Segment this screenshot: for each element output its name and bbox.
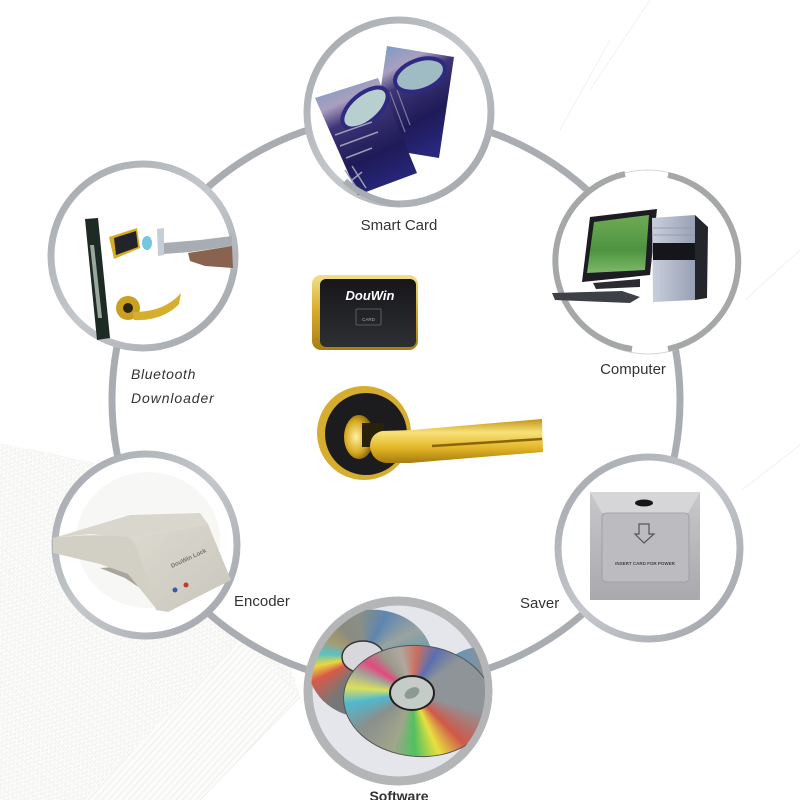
card zone text: CARD [362,317,376,322]
indicator [635,500,653,506]
tower [652,215,708,302]
top face [53,513,208,538]
card zone [356,309,381,325]
label: saver: Saver [520,595,559,612]
rose [317,386,411,480]
gold reader [109,228,140,259]
front disc [343,644,485,758]
red LED [184,582,188,588]
lever [370,419,543,463]
monitor [582,209,657,289]
central door handle [317,386,543,480]
blue LED [172,588,178,592]
right disc [456,648,485,741]
node: saver [558,457,740,639]
front disc hub [390,676,434,710]
back card [372,46,454,158]
main connecting ring [112,116,680,684]
door handle [116,293,181,320]
back disc hub [342,641,384,673]
device brand: DouWin Lock [170,548,208,570]
label: smart card: Smart Card [361,217,437,234]
label: bluetooth downloader [131,366,215,406]
wireless waves [142,236,152,250]
label: computer: Computer [600,361,666,378]
keyboard [552,291,640,303]
front card [315,78,417,195]
node: bluetooth downloader [51,164,235,348]
door lock strip [85,218,110,340]
knob [344,415,374,459]
switch plate [590,492,700,600]
arrow [635,524,654,543]
label: bluetooth downloader: Downloader [131,390,215,406]
label: bluetooth downloader: Bluetooth [131,366,196,382]
node: computer [552,170,740,354]
hand with phone [157,228,233,268]
rose plate [325,393,407,475]
underside shadow [100,566,146,592]
brand: DouWin [346,288,395,303]
back disc [311,610,430,715]
node: software [304,596,492,786]
node: smart card [307,20,491,204]
label: encoder: Encoder [234,593,290,610]
card slot panel [602,513,689,582]
node: encoder [53,454,237,636]
slot [432,439,542,446]
lip [53,535,158,611]
encoder device [53,513,231,612]
neck [362,423,384,447]
central wall reader [312,275,418,350]
front face [130,524,231,612]
slot text: INSERT CARD FOR POWER [615,561,676,566]
